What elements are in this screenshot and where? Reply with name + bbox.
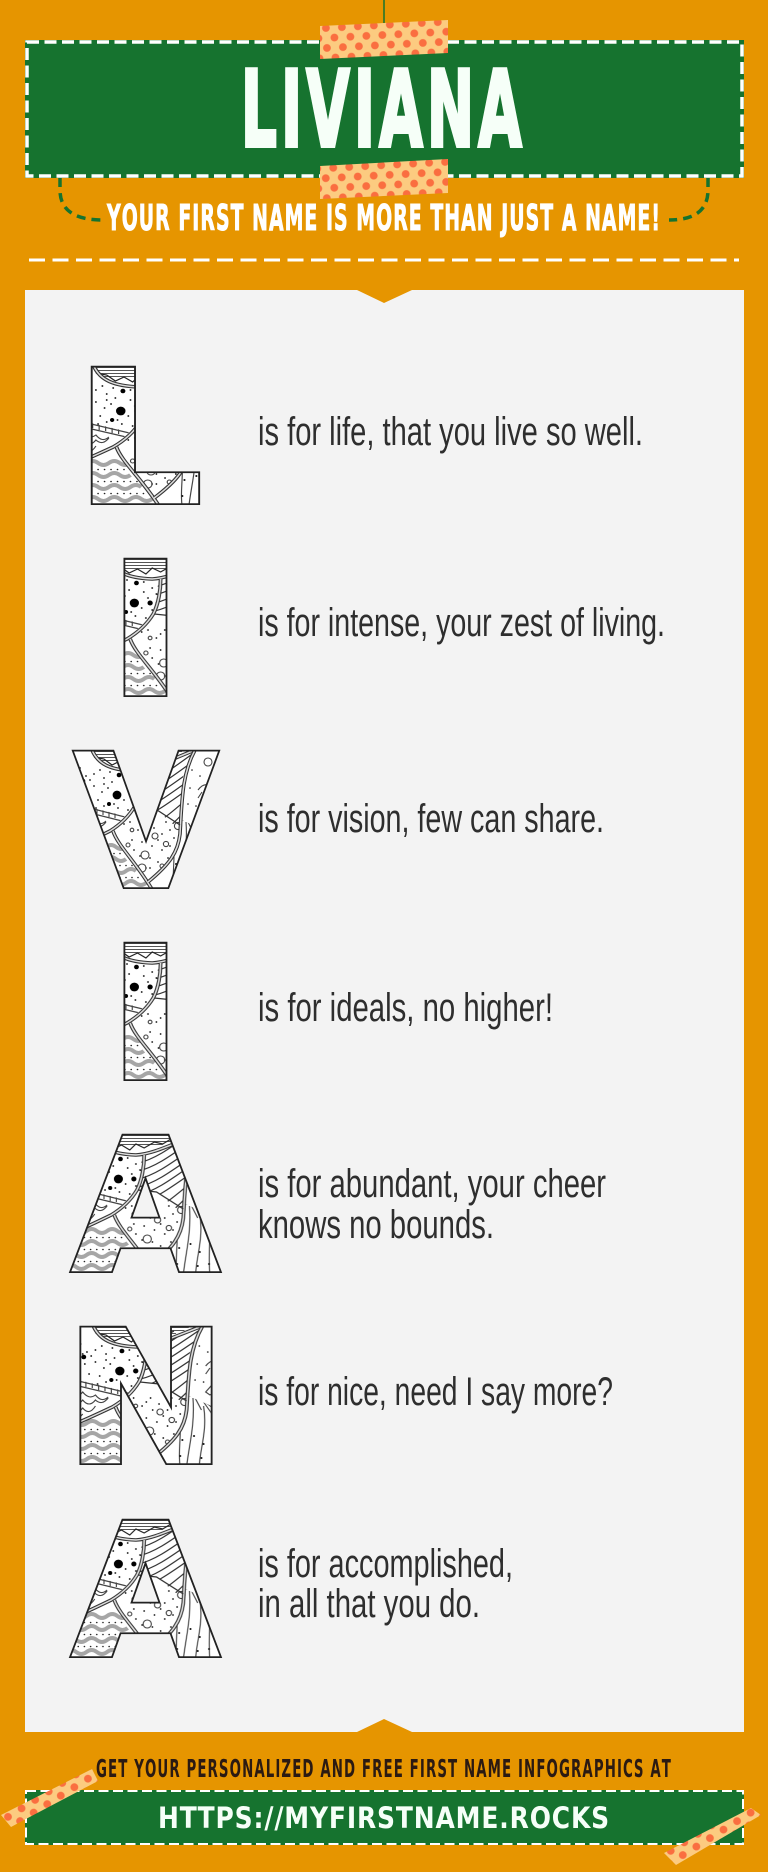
header banner (25, 40, 744, 178)
tape: top (320, 20, 448, 59)
letter A: A (74, 1103, 217, 1312)
letter A second: A (74, 1488, 217, 1697)
text: A lines (258, 1162, 606, 1247)
title: LIVIANA (241, 49, 526, 171)
text: V line: is for vision, few can share. (258, 797, 604, 841)
footer banner (25, 1790, 744, 1845)
letter I: I (110, 526, 181, 736)
letter I: I (110, 526, 181, 736)
letter A second: A (74, 1488, 217, 1697)
letter L: L (77, 335, 201, 544)
text: second A lines (258, 1542, 513, 1626)
text: N line: is for nice, need I say more? (258, 1370, 613, 1414)
panel: letters (25, 290, 744, 1732)
letter I second: I (110, 910, 181, 1120)
letter I second: I (110, 910, 181, 1120)
text: A lines: is for abundant, your cheer (258, 1162, 606, 1206)
letter N: N (66, 1294, 226, 1504)
footer url: HTTPS://MYFIRSTNAME.ROCKS (158, 1801, 610, 1835)
text: second A lines: in all that you do. (258, 1582, 480, 1626)
text: second A lines: is for accomplished, (258, 1542, 513, 1586)
letter N: N (66, 1294, 226, 1504)
letter A: A (74, 1103, 217, 1312)
text: A lines: knows no bounds. (258, 1203, 494, 1247)
text: second I line: is for ideals, no higher! (258, 986, 553, 1030)
tape: footer left (1, 1769, 98, 1827)
connector: right (669, 178, 708, 220)
letter V: V (76, 719, 216, 928)
tape: bottom (320, 159, 448, 199)
letter V: V (76, 719, 216, 928)
connector: left (60, 178, 103, 220)
letter L: L (77, 335, 201, 544)
hanging line (383, 0, 385, 26)
tape: footer right (664, 1808, 761, 1865)
